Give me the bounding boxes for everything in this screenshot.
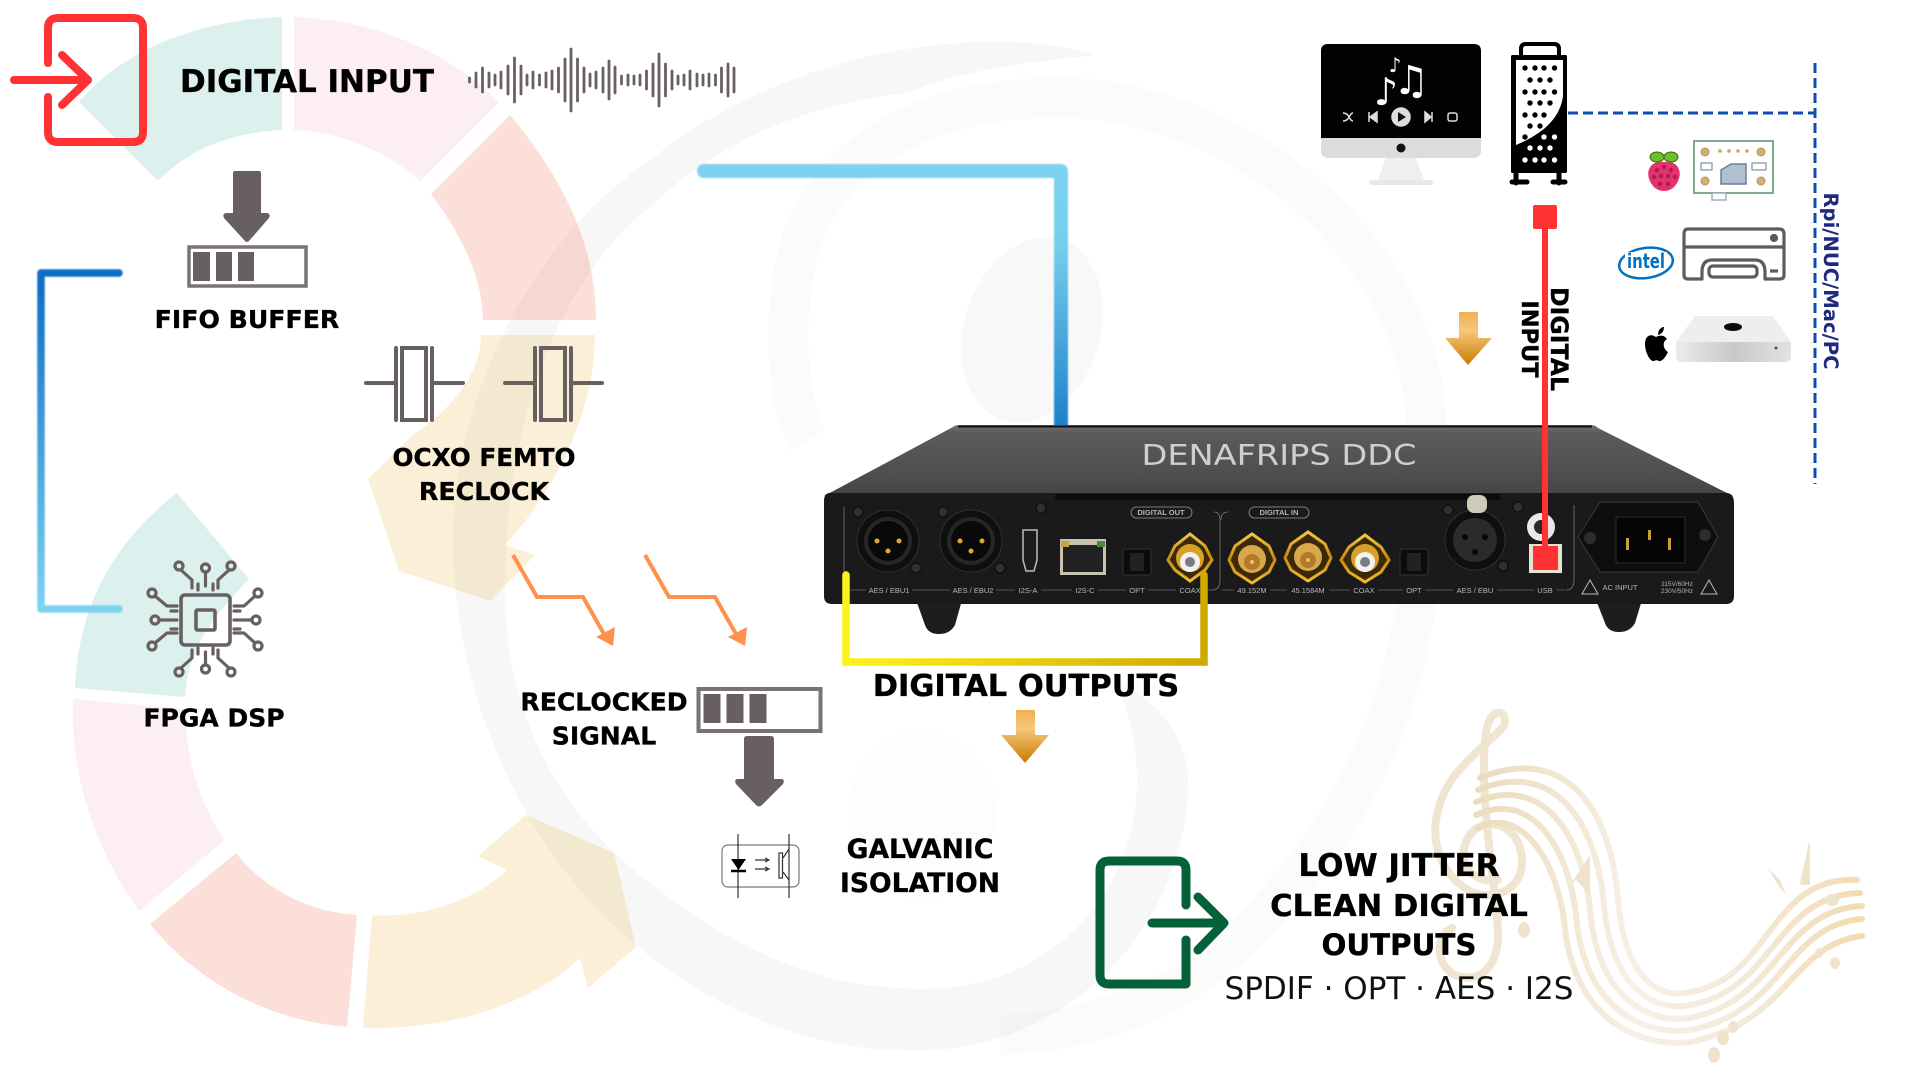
icon: digital output (green) (1100, 861, 1224, 984)
optical output (1123, 549, 1151, 575)
connector: blue dashed bus (1568, 63, 1815, 484)
label: GALVANIC ISOLATION: ISOLATION (840, 868, 1000, 899)
icon: gray down arrow to isolator (735, 736, 784, 806)
label: rotated digital input: DIGITAL (1545, 287, 1573, 391)
label: RECLOCKED SIGNAL (520, 688, 688, 750)
BNC 49.152M (1229, 534, 1275, 583)
background logo watermark (453, 42, 1426, 1051)
connector: yellow digital output wire (846, 575, 1204, 662)
label: RECLOCKED SIGNAL: RECLOCKED (520, 688, 688, 716)
label: DIGITAL OUTPUTS: DIGITAL OUTPUTS (873, 669, 1179, 704)
ring segment: salmon right (431, 115, 596, 320)
XLR output 2 (940, 510, 1002, 572)
arrow: gold under digital outputs (1001, 710, 1049, 763)
player controls (1343, 108, 1457, 126)
music notes on screen: ♪ (1389, 53, 1401, 77)
icon: Apple logo (1645, 327, 1668, 361)
text block: low jitter clean digital outputs: CLEAN DIGITAL (1270, 889, 1528, 924)
port labels: AES / EBU (1457, 586, 1493, 595)
heading: digital input: DIGITAL INPUT (180, 64, 434, 100)
icon: Mac mini (1676, 316, 1791, 362)
icon: crystal oscillators (366, 348, 602, 420)
port labels: I2S-C (1075, 586, 1095, 595)
ring segment: yellow right arrow (368, 335, 595, 601)
icon: Mac Pro tower (1511, 44, 1567, 183)
port labels: COAX (1353, 586, 1375, 595)
connector: blue line into device (704, 500, 840, 514)
port labels: I2S-A (1019, 586, 1037, 595)
device top surface (824, 425, 1733, 496)
device rear panel (824, 493, 1734, 604)
icon: Intel logo (1617, 244, 1675, 282)
label: OCXO FEMTO RECLOCK: RECLOCK (419, 477, 551, 506)
AC power inlet (1578, 502, 1718, 572)
port labels: 49.152M (1237, 586, 1267, 595)
label: Rpi/NUC/Mac/PC: Rpi/NUC/Mac/PC (1819, 192, 1842, 370)
text block: low jitter clean digital outputs: OUTPUTS (1321, 928, 1477, 962)
USB port (1529, 544, 1562, 573)
treble clef (1435, 713, 1522, 978)
digital in pill: DIGITAL IN (1260, 508, 1298, 517)
text block: low jitter clean digital outputs: SPDIF · OPT · AES · I2S (1225, 971, 1573, 1007)
ring segment: yellow bottom arrow (363, 815, 636, 1028)
connector: light blue to dark blue line (704, 171, 1061, 432)
device feet (916, 600, 1642, 634)
text block: low jitter clean digital outputs (1225, 848, 1573, 1007)
connector: left loop line (41, 273, 119, 609)
label: FPGA DSP: FPGA DSP (143, 704, 285, 732)
digital in pill (1249, 507, 1309, 518)
ring segment: teal left (75, 493, 249, 697)
arrow: gold above device (1445, 312, 1492, 365)
icon: iMac with music player (1321, 44, 1481, 185)
XLR input (1445, 495, 1505, 570)
label: OCXO FEMTO RECLOCK (393, 443, 575, 506)
label: RECLOCKED SIGNAL: SIGNAL (552, 722, 656, 750)
music notes on screen (1374, 53, 1429, 114)
XLR output 1 (857, 510, 919, 572)
BNC 45.1584M (1285, 532, 1331, 581)
port labels: 45.1584M (1291, 586, 1325, 595)
staff lines (1480, 768, 1857, 994)
label: OCXO FEMTO RECLOCK: OCXO FEMTO (393, 443, 575, 472)
text block: low jitter clean digital outputs: LOW JITTER (1298, 848, 1500, 884)
port labels: OPT (1129, 586, 1145, 595)
port labels (866, 584, 1556, 596)
musical notes (1518, 843, 1840, 1063)
icon: circuit board (1694, 141, 1773, 200)
music notes on screen: ♪ (1374, 70, 1398, 114)
optical input (1400, 549, 1428, 575)
AC input label: 230V/50Hz (1661, 588, 1693, 595)
music notes on screen: ♫ (1393, 58, 1429, 104)
port labels: AES / EBU1 (869, 586, 909, 595)
icon: reclocked buffer (698, 689, 820, 731)
label: rotated digital input: INPUT (1516, 300, 1542, 378)
arrow: orange reclock signal 2 (645, 555, 747, 646)
label: FIFO BUFFER: FIFO BUFFER (155, 305, 339, 334)
USB status ring (1527, 513, 1555, 541)
ring segment: pink top (294, 17, 499, 181)
ring segment: teal top (79, 17, 282, 181)
icon: FPGA chip (148, 562, 262, 676)
HDMI port (1023, 530, 1037, 571)
coax output (1168, 534, 1212, 581)
label: GALVANIC ISOLATION: GALVANIC (847, 834, 993, 865)
port labels: AES / EBU2 (953, 586, 993, 595)
icon: gray down arrow to FIFO buffer (223, 171, 270, 242)
icon: FIFO buffer (189, 247, 306, 286)
digital out pill (1131, 507, 1192, 518)
icon: Intel NUC box (1684, 229, 1784, 279)
RJ45 port (1060, 539, 1106, 575)
ring segment: salmon bottom (150, 853, 357, 1027)
arrow: orange reclock signal 1 (513, 555, 615, 646)
digital out pill: DIGITAL OUT (1137, 508, 1185, 517)
AC input label: 115V/60Hz (1661, 581, 1693, 588)
port labels: USB (1537, 586, 1553, 595)
AC input label: AC INPUT (1602, 583, 1638, 592)
coax input (1341, 535, 1389, 582)
device brand text: DENAFRIPS DDC (1142, 439, 1416, 472)
icon: audio waveform (470, 49, 734, 111)
panel screws (853, 502, 1523, 573)
ring segment: pink left (73, 699, 225, 911)
port labels: OPT (1406, 586, 1422, 595)
label: rotated digital input (1516, 287, 1573, 391)
connector: red digital input wire (1533, 205, 1558, 570)
icon: Raspberry Pi logo (1648, 152, 1680, 191)
treble clef and music staff (1435, 713, 1862, 1063)
icon: Intel logo: intel (1627, 249, 1665, 273)
icon: optocoupler (722, 834, 799, 898)
AC input label (1582, 580, 1717, 595)
icon: digital input (red) (14, 18, 143, 142)
label: GALVANIC ISOLATION (840, 834, 1000, 899)
port labels: COAX (1179, 586, 1201, 595)
background ring: circular process arrows (73, 17, 636, 1028)
device: Denafrips DDC rear view (824, 425, 1734, 634)
